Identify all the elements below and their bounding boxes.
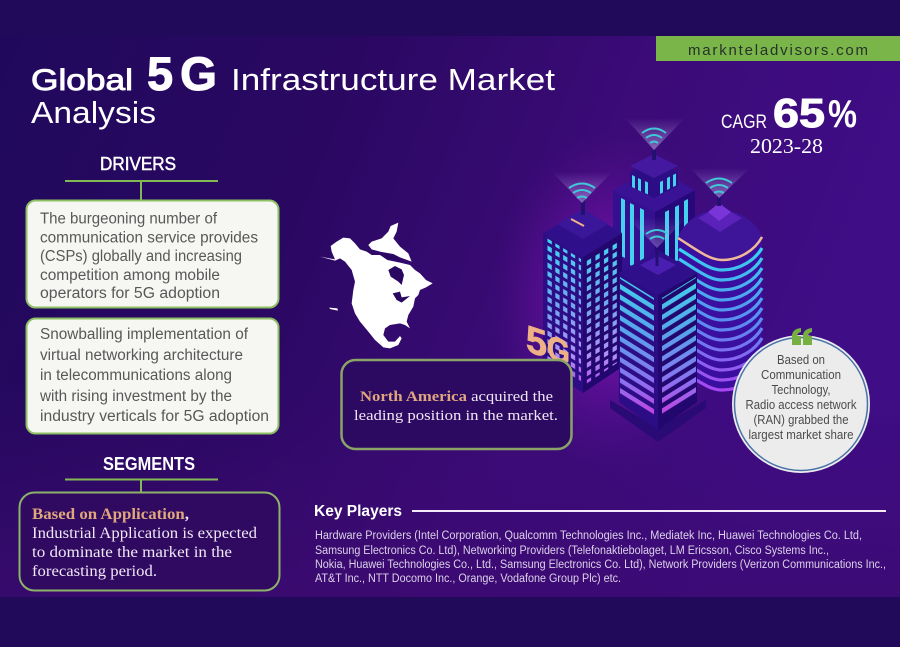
panel: driver 1: communication service provides — [40, 230, 258, 246]
panel: driver 1: The burgeoning number of — [40, 210, 218, 228]
CAGR stat — [721, 90, 857, 158]
callout: communication technology: largest market share — [748, 428, 854, 442]
key players — [314, 503, 886, 585]
panel: driver 2: in telecommunications along — [40, 367, 232, 384]
back building — [613, 150, 695, 300]
callout: communication technology: Based on — [777, 353, 825, 367]
panel: driver 2: Snowballing implementation of — [40, 326, 249, 343]
illustration: 5G buildings — [514, 121, 764, 442]
callout: communication technology: Radio access network — [746, 398, 857, 412]
CAGR stat: 65 — [773, 90, 825, 136]
panel: segment application — [20, 492, 280, 590]
callout: North America — [342, 360, 572, 449]
panel: driver 2: industry verticals for 5G adoption — [40, 408, 269, 425]
title: Infrastructure Market — [231, 62, 555, 97]
heading: drivers: DRIVERS — [100, 154, 176, 174]
CAGR stat: % — [828, 93, 857, 136]
panel: segment application: forecasting period. — [32, 563, 157, 580]
logo bar — [656, 36, 900, 61]
5G sign: G — [547, 328, 570, 373]
panel: segment application: Industrial Application is expected — [32, 525, 257, 542]
key players: Samsung Electronics Co. Ltd), Networking Providers (Telefonaktiebolaget, LM Ericsson, Cisco Systems Inc., — [315, 545, 829, 557]
panel: segment application: Based on Application , — [32, 506, 189, 523]
CAGR stat: CAGR — [721, 112, 767, 133]
front building — [610, 250, 710, 442]
map: North America — [320, 223, 433, 348]
logo bar: marknteladvisors.com — [688, 42, 868, 59]
title: Analysis — [31, 95, 156, 130]
heading: segments: SEGMENTS — [103, 454, 195, 474]
panel: driver 1: operators for 5G adoption — [40, 285, 220, 302]
5G sign: 5 — [526, 318, 547, 367]
left building — [543, 198, 622, 393]
title: Global — [31, 64, 133, 97]
panel: segment application: to dominate the market in the — [32, 544, 232, 561]
panel: driver 1: (CSPs) globally and increasing — [40, 248, 242, 265]
5G sign — [526, 318, 570, 373]
panel: driver 1 — [26, 200, 278, 308]
title: G — [180, 47, 217, 100]
wifi signals — [552, 118, 750, 248]
panel: driver 2 — [26, 318, 278, 434]
CAGR stat: 2023-28 — [750, 134, 823, 158]
key players: AT&T Inc., NTT Docomo Inc., Orange, Vodafone Group Plc) etc. — [315, 573, 621, 585]
callout: North America: leading position in the market. — [354, 408, 558, 424]
title — [31, 47, 555, 130]
panel: driver 1: competition among mobile — [40, 267, 220, 284]
panel: driver 2: with rising investment by the — [39, 388, 232, 405]
callout: North America: North America acquired the — [360, 389, 553, 405]
key players: Hardware Providers (Intel Corporation, Qualcomm Technologies Inc., Mediatek Inc, Huawei Technologies Co. Ltd, — [315, 530, 862, 542]
key players: Key Players — [314, 503, 402, 520]
cylinder tower — [678, 190, 762, 392]
panel: driver 2: virtual networking architecture — [40, 347, 243, 364]
callout: communication technology: Communication — [761, 368, 841, 382]
title: 5 — [147, 47, 173, 100]
callout: communication technology: Technology, — [772, 383, 830, 397]
callout: communication technology: (RAN) grabbed the — [754, 413, 849, 427]
callout: communication technology — [732, 328, 870, 473]
icon: quote mark — [792, 328, 812, 345]
